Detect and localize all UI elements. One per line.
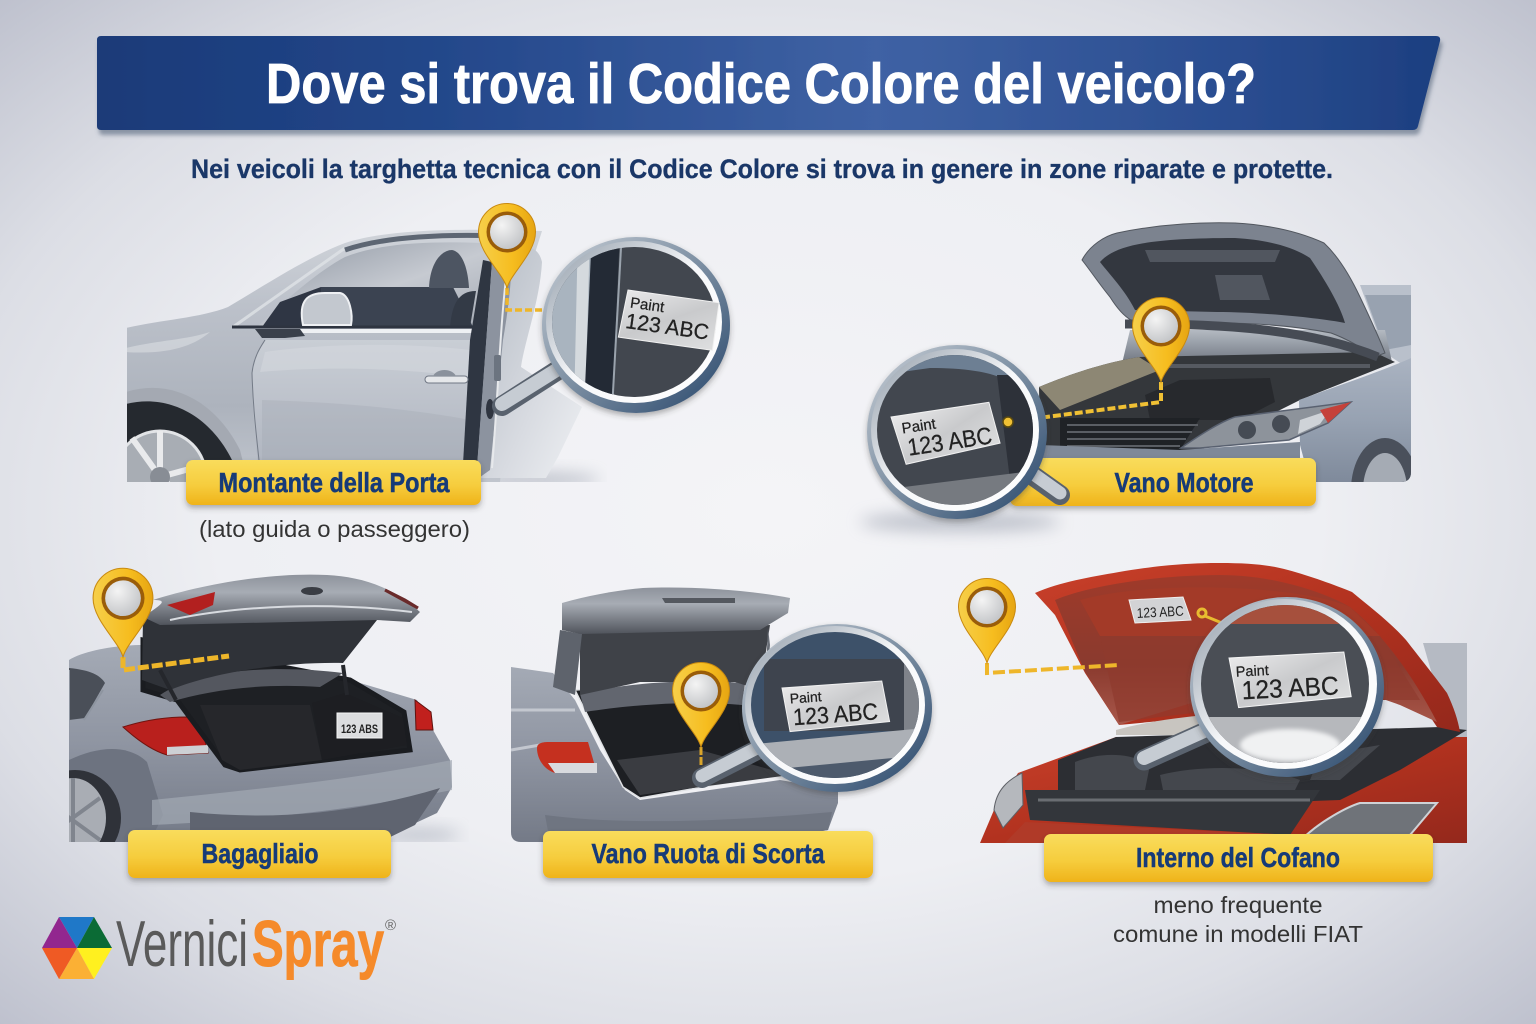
- icon: location pin: [1132, 298, 1190, 382]
- note: [1113, 892, 1363, 947]
- panel: vano ruota di scorta: [511, 587, 935, 878]
- plate: 123 ABS: [341, 724, 378, 736]
- registered mark: ®: [385, 917, 396, 934]
- yellow dashed leader: [700, 747, 702, 765]
- wordmark accent: Spray: [252, 907, 384, 980]
- title: Dove si trova il Codice Colore del veicolo?: [266, 52, 1256, 116]
- label: [543, 831, 873, 878]
- magnifier with plate: [502, 230, 740, 413]
- label: Vano Ruota di Scorta: [592, 838, 825, 869]
- yellow dashed leader: [1008, 382, 1161, 422]
- plate: Paint: [901, 415, 938, 437]
- note: meno frequente: [1154, 892, 1322, 918]
- illustration: silver car with open door: [127, 230, 599, 482]
- icon: colour hexagon: [42, 917, 112, 979]
- plate: [618, 290, 719, 350]
- label: Vano Motore: [1114, 467, 1254, 498]
- plate: [891, 402, 1001, 465]
- magnifier with plate: [860, 345, 1060, 532]
- plate: Paint: [629, 295, 666, 316]
- yellow dashed leader: [507, 288, 542, 310]
- icon: location pin: [958, 578, 1016, 663]
- title banner: [97, 36, 1440, 130]
- panel: vano motore: [860, 223, 1419, 542]
- plate: 123 ABC: [624, 309, 711, 345]
- label: Bagagliaio: [202, 838, 318, 869]
- icon: location pin: [478, 204, 536, 288]
- illustration: grey car with raised hood: [1039, 222, 1411, 482]
- label: [128, 830, 391, 878]
- plate in hood: 123 ABC: [1136, 603, 1184, 621]
- plate: Paint: [1235, 663, 1269, 681]
- panel: montante della porta: [114, 204, 740, 542]
- plate: [337, 713, 382, 738]
- icon: location pin: [93, 568, 153, 657]
- yellow dashed leader: [987, 663, 1119, 673]
- label: Interno del Cofano: [1136, 842, 1340, 873]
- magnifier with plate: [1144, 597, 1384, 777]
- label: [1010, 458, 1316, 506]
- label: [1044, 834, 1433, 882]
- panel: interno del cofano: [958, 563, 1467, 947]
- panel: bagagliaio: [29, 568, 460, 878]
- note: comune in modelli FIAT: [1113, 921, 1363, 947]
- note: (lato guida o passeggero): [199, 516, 470, 542]
- magnifier with plate: [702, 620, 935, 792]
- plate: [782, 681, 890, 732]
- plate: [1229, 652, 1351, 708]
- logo: VerniciSpray: [42, 907, 396, 980]
- wordmark: Vernici: [116, 907, 248, 980]
- label: [186, 460, 481, 505]
- plate: 123 ABC: [1241, 670, 1339, 705]
- label: Montante della Porta: [218, 467, 450, 498]
- plate: 123 ABC: [906, 422, 994, 462]
- subtitle: Nei veicoli la targhetta tecnica con il Codice Colore si trova in genere in zone riparate e protette.: [191, 154, 1333, 184]
- illustration: grey car with open trunk: [69, 574, 458, 842]
- plate: 123 ABC: [792, 698, 879, 730]
- yellow dashed leader: [123, 656, 229, 670]
- plate: Paint: [789, 688, 822, 706]
- icon: location pin: [672, 662, 730, 747]
- illustration: car rear with open trunk: [511, 587, 838, 842]
- plate in hood: [1129, 597, 1191, 623]
- illustration: red car with raised hood: [980, 563, 1467, 843]
